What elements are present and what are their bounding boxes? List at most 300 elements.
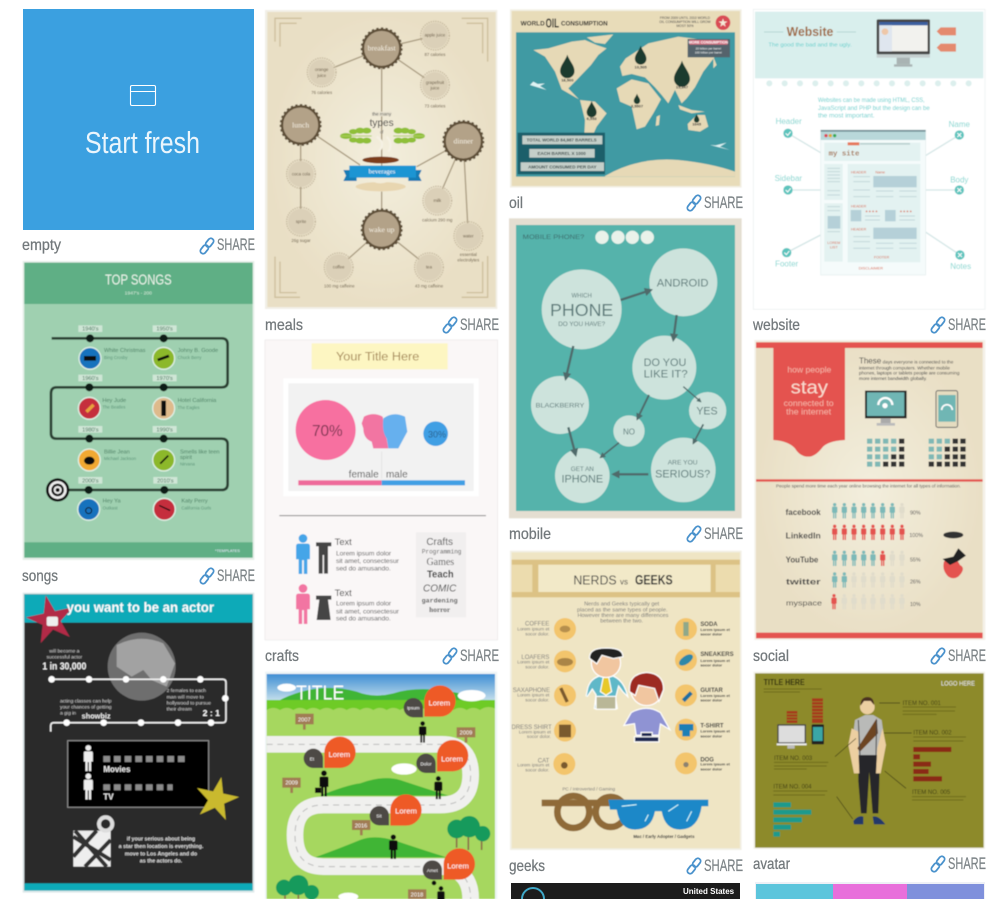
heading: NERDS	[573, 573, 617, 588]
text: location	[119, 837, 204, 864]
panel: meals template: 73 calories	[425, 103, 445, 108]
connectors and checkpoints: Name	[949, 120, 971, 129]
panel: world oil template: FROM 2009 UNTIL 2010 WORLD	[660, 16, 711, 20]
panel: start fresh card	[23, 9, 254, 230]
song titles: Billie Jean	[104, 449, 130, 455]
panel: meals template: tea	[426, 265, 433, 270]
panel: nerds vs geeks template: Mac / Early Adopter / Gadgets	[633, 834, 695, 839]
label: website	[752, 316, 986, 334]
icon: monitor	[877, 19, 930, 67]
percent labels: 26%	[910, 579, 921, 585]
signposts: 2009	[460, 730, 472, 736]
label: songs	[22, 567, 255, 585]
people with text: Text	[335, 537, 352, 547]
song titles: Smells like teen	[180, 449, 220, 455]
badge labels: wake up	[369, 225, 395, 234]
icon: yellow star	[192, 773, 242, 822]
chart: red bars	[913, 747, 951, 781]
percent labels: 55%	[910, 558, 921, 564]
panel: meals template	[265, 10, 497, 309]
label: oil	[509, 194, 743, 212]
left column text: Lorem ipsum et	[517, 693, 550, 698]
panel: crafts template	[265, 340, 498, 640]
text: 2 females: man will move to	[167, 694, 204, 700]
connectors and checkpoints: Sidebar	[775, 174, 802, 183]
trees	[276, 816, 490, 899]
text: location: as the actors do.	[140, 858, 183, 864]
bubbles: Lorem	[328, 750, 350, 759]
right column text: SNEAKERS	[700, 652, 734, 658]
panel: world oil template: MOST 50%	[676, 24, 694, 28]
intro text	[818, 98, 930, 120]
left column text: socor dolor.	[525, 631, 549, 636]
chart: devices	[777, 698, 824, 749]
text: 2 females: their dream	[167, 706, 192, 712]
panel: nerds vs geeks template: PC / Introverted / Gaming	[562, 787, 616, 792]
illustration: browser wireframe: ★★★★	[899, 210, 913, 214]
panel: meals template: 87 calories	[425, 52, 445, 57]
panel: top songs template	[23, 261, 254, 560]
left column text: CAT	[538, 758, 550, 764]
bubbles: Lorem	[428, 699, 450, 708]
panel: meals template: sprite	[296, 219, 307, 224]
flow labels: LIKE IT?	[644, 369, 688, 381]
tags	[937, 27, 956, 52]
label: mobile	[509, 525, 743, 543]
road	[267, 744, 471, 899]
left column icons	[553, 618, 576, 775]
social network names: facebook	[786, 507, 821, 517]
left column text: COFFEE	[525, 622, 549, 628]
people with text: Text	[335, 588, 352, 598]
label: mobile: mobile	[509, 526, 551, 543]
illustration: browser wireframe: HEADER	[851, 204, 867, 208]
illustration: glasses	[542, 796, 708, 830]
label: avatar: avatar	[753, 856, 791, 873]
icon: star badge	[716, 15, 730, 30]
callout: consumption: 20 billion per barrel	[696, 47, 721, 51]
stat: 1 in 30,000: successful actor	[46, 654, 83, 660]
panel: meals template: 43 mg caffeine	[415, 283, 444, 288]
intro text: between the two.	[600, 619, 643, 625]
intro text: Nerds and Geeks typically get	[584, 601, 660, 607]
people with text	[296, 534, 400, 624]
people with text: Lorem ipsum dolor	[336, 550, 392, 557]
panel: meals template: calcium 290 mg	[422, 217, 453, 222]
percent labels	[909, 510, 923, 608]
panel: meals template: juice	[316, 73, 327, 78]
left column text: socor dolor.	[525, 767, 549, 772]
heading: LOGO HERE	[941, 681, 975, 688]
bubbles: Lorem	[395, 807, 417, 816]
word cloud: Games	[426, 557, 454, 568]
song titles: Hey Jude	[102, 398, 126, 404]
song titles: Hotel California	[178, 398, 217, 404]
right column text: SODA	[700, 622, 718, 628]
panel: meals template: 76 calories	[311, 90, 332, 95]
title banner	[312, 343, 448, 369]
people with text: sit amet, consectesur	[336, 558, 400, 565]
illustration: browser wireframe: HEADER	[851, 170, 867, 174]
callout: totals: AMOUNT CONSUMED PER DAY	[528, 164, 597, 170]
decade labels: 1970's	[156, 376, 173, 382]
items: ITEM NO. 004	[773, 784, 812, 790]
bubbles: Amet	[427, 868, 438, 873]
banner: how people stay connected: connected to	[784, 399, 834, 408]
right column text: Lorem ipsum et	[700, 729, 731, 734]
panel: movies vs tv: TV	[103, 792, 114, 801]
panel: meals template: 100 mg caffeine	[324, 283, 355, 288]
word cloud	[416, 532, 466, 617]
label: crafts: SHARE	[460, 647, 499, 665]
right column text: DOG	[700, 757, 714, 763]
bubbles: Et	[310, 756, 315, 761]
text: acting classes: acting classes can help	[60, 699, 112, 705]
panel: avatar template	[753, 672, 985, 849]
text: location: move to Los Angeles and do	[125, 851, 198, 857]
panel: top songs template: Michael Jackson	[104, 456, 137, 461]
center: types of beverages: beverages	[369, 169, 396, 176]
right column text: GUITAR	[700, 688, 723, 694]
chart: phone grid	[929, 439, 966, 467]
right column text: socor dolor	[700, 698, 723, 703]
word cloud: Programming	[422, 548, 462, 555]
callout: consumption: MORE CONSUMPTION	[689, 41, 728, 45]
left column text: Lorem ipsum et	[517, 660, 550, 665]
chart: gender split	[283, 378, 479, 496]
connectors and checkpoints: Notes	[950, 262, 971, 271]
bubbles	[304, 685, 475, 880]
heading: start fresh: Start fresh	[85, 125, 200, 160]
decade labels: 1990's	[156, 427, 173, 433]
bubbles: Lorem	[441, 755, 463, 764]
signposts: 2016	[355, 823, 367, 829]
heading: you want to be an actor	[67, 599, 214, 615]
right column text: Lorem ipsum et	[700, 627, 731, 632]
badge labels: lunch	[292, 121, 309, 130]
text: 2 females: 2 : 1	[203, 708, 220, 718]
panel: social template	[754, 340, 985, 640]
heading	[538, 565, 711, 592]
decade labels: 1980's	[82, 427, 99, 433]
icon: browser window	[130, 86, 156, 106]
stat: 1 in 30,000: will become a	[49, 649, 80, 655]
flow labels: PHONE	[550, 300, 613, 320]
header band	[755, 12, 983, 78]
connectors and checkpoints: Header	[776, 117, 802, 126]
walkers	[315, 721, 445, 899]
panel: meals template: apple juice	[425, 33, 446, 38]
flow labels: ARE YOU	[668, 459, 698, 466]
decorative dots	[766, 80, 972, 86]
panel: nerds vs geeks template	[510, 551, 742, 850]
intro text: These	[859, 357, 882, 366]
chart: gender split: 70%	[312, 423, 343, 440]
panel: social template: People spend more time each year online browsing the internet for all types of information.	[776, 483, 961, 488]
items: ITEM NO. 002	[913, 731, 952, 737]
chart: teal bars	[773, 802, 811, 837]
decade markers	[85, 334, 168, 494]
flow labels: ANDROID	[657, 278, 709, 290]
chart: timeline track	[51, 338, 228, 490]
left column text: socor dolor.	[527, 734, 551, 739]
panel: mobile flowchart template: MOBILE PHONE?	[523, 234, 585, 241]
signposts: 2009	[285, 781, 298, 787]
badge labels: breakfast	[368, 44, 397, 53]
panel: meals template: coffee	[333, 265, 345, 270]
decade labels: 1960's	[82, 376, 99, 382]
word cloud: COMIC	[423, 583, 457, 594]
text: location: if your serious about being	[127, 837, 195, 843]
chart: gender split: female	[349, 470, 379, 481]
heading: TITLE	[296, 682, 344, 704]
callout: consumption: 100 billion per barrel	[695, 51, 722, 55]
label: empty	[22, 236, 255, 255]
label: empty: SHARE	[217, 236, 255, 254]
label: geeks: SHARE	[704, 857, 743, 875]
signposts: 2018	[411, 893, 423, 899]
illustration: man	[848, 697, 886, 824]
panel: dark template cropped	[511, 883, 740, 899]
text: acting classes: a gig in	[60, 711, 76, 717]
people with text: sit amet, consectesur	[336, 608, 400, 615]
song pins	[78, 347, 175, 520]
panel: movies vs tv	[68, 741, 209, 807]
panel: meals template: milk	[433, 198, 442, 203]
flow circles	[531, 248, 726, 503]
left column text	[512, 622, 552, 772]
panel: actor template	[22, 590, 254, 893]
intro text: internet through computers. Whether mobile	[859, 365, 950, 370]
word cloud: Crafts	[426, 537, 453, 548]
right column text: socor dolor	[700, 733, 723, 738]
panel: top songs template: TOP SONGS	[105, 272, 172, 288]
center: types of beverages	[340, 111, 425, 191]
heading: vs	[620, 578, 628, 587]
bubbles: Ipsum	[407, 706, 420, 711]
panel: dark template cropped: United States	[683, 887, 735, 896]
social network names: LinkedIn	[786, 530, 821, 540]
text: location: a star then location is everything.	[119, 844, 204, 850]
chart: world map: 15,347	[676, 85, 689, 90]
text: acting classes: your chances of getting	[60, 704, 112, 710]
chart: world map	[516, 32, 735, 177]
social network names: myspace	[786, 599, 822, 608]
heading	[521, 16, 608, 30]
label: oil: oil	[509, 195, 523, 212]
panel: colourful template cropped	[755, 882, 985, 899]
word cloud: Teach	[427, 570, 454, 581]
banner: how people stay connected: how people	[787, 365, 832, 374]
right column text: socor dolor	[700, 766, 723, 771]
icon: map pin	[73, 817, 112, 867]
label: crafts: crafts	[265, 648, 299, 665]
connectors and checkpoints	[775, 117, 971, 271]
song titles: Katy Perry	[181, 498, 208, 504]
people with text: Lorem ipsum dolor	[336, 601, 392, 608]
illustration: browser wireframe: LOREM	[827, 241, 840, 245]
flow labels	[536, 278, 718, 486]
flow labels: SERIOUS?	[655, 468, 710, 480]
intro text	[577, 601, 669, 625]
panel: meals template: water	[463, 233, 474, 238]
connectors and checkpoints: Footer	[775, 260, 799, 269]
text: acting classes: showbiz	[82, 711, 111, 720]
panel: world oil template	[510, 9, 742, 188]
icon: phone	[936, 391, 958, 427]
badge labels	[292, 44, 474, 234]
flow arrows	[566, 290, 703, 474]
intro text: days everyone is connected to the	[883, 360, 954, 365]
people with text: sed do amusando.	[336, 616, 391, 623]
intro text: Websites can be made using HTML, CSS,	[818, 98, 925, 104]
panel: top songs template: Nirvana	[180, 462, 195, 467]
bubbles: Lorem	[447, 861, 469, 870]
intro text: However there are many differences	[577, 613, 669, 619]
callout: totals: EACH BARREL X 1000	[537, 151, 586, 157]
label: meals	[265, 316, 499, 334]
decade labels	[78, 325, 177, 484]
flow labels: WHICH	[572, 293, 592, 299]
song titles	[102, 348, 220, 504]
decade labels: 1940's	[82, 327, 99, 333]
flow labels: YES	[696, 405, 718, 417]
text: 2 females	[167, 688, 220, 718]
heading: CONSUMPTION	[561, 21, 608, 28]
social network names: YouTube	[786, 555, 818, 565]
panel: top songs template: Chuck Berry	[178, 355, 202, 360]
panel: top songs template: 1947's - 200	[125, 291, 152, 297]
callout: consumption	[688, 39, 730, 57]
chart: world map: 6,553	[587, 116, 597, 121]
left column text: LOAFERS	[521, 655, 549, 661]
label: meals: SHARE	[460, 316, 499, 334]
right column icons	[675, 618, 697, 774]
flow labels: IPHONE	[561, 474, 603, 486]
right column text: T-SHIRT	[700, 723, 724, 729]
chart: world map: 18,500	[561, 77, 574, 82]
panel: top songs template: California Gurls	[181, 505, 211, 510]
flow labels: DO YOU HAVE?	[558, 321, 606, 328]
percent labels: 90%	[910, 510, 921, 516]
panel: road timeline template	[265, 672, 497, 899]
label: oil: SHARE	[704, 194, 743, 212]
label: empty: empty	[22, 237, 61, 254]
illustration: browser wireframe	[821, 130, 926, 275]
chart: gender split: 30%	[428, 430, 446, 440]
panel: meals template: grapefruit	[426, 80, 445, 85]
panel: top songs template: *TEMPLATES	[215, 548, 240, 553]
items: ITEM NO. 001	[903, 701, 942, 707]
illustration: nerd	[587, 649, 627, 709]
small badges	[421, 21, 449, 50]
right column text	[700, 622, 734, 771]
chart: world map: 10,505	[635, 65, 648, 70]
illustration: browser wireframe: DISCLAIMER	[859, 266, 883, 271]
right column text: Lorem ipsum et	[700, 762, 731, 767]
label: meals: meals	[265, 317, 303, 334]
bubbles: Dolor	[420, 761, 432, 766]
panel: top songs template: Outkast	[103, 505, 118, 510]
stat: 1 in 30,000: 1 in 30,000	[42, 661, 87, 672]
label: avatar	[753, 855, 986, 873]
illustration: browser wireframe: HEADER	[851, 228, 867, 232]
header band: Website	[787, 24, 833, 39]
chart: world map: 3,5507	[631, 104, 644, 109]
panel: meals template: coca cola	[292, 171, 311, 176]
percent labels: 100%	[909, 533, 923, 539]
intro text: placed as the same types of people.	[577, 607, 668, 613]
right column text: Lorem ipsum et	[700, 693, 731, 698]
social network names	[786, 507, 822, 608]
right column text: Lorem ipsum et	[700, 658, 731, 663]
flow labels: GET AN	[571, 466, 594, 473]
signposts: 2007	[298, 717, 311, 723]
decade labels: 2000's	[82, 478, 99, 484]
center: types of beverages: the many	[372, 111, 392, 116]
left column text: Lorem ipsum et	[517, 627, 550, 632]
left column text: socor dolor.	[525, 664, 549, 669]
text: 2 females: 2 females to each	[167, 688, 206, 694]
percent labels: 10%	[910, 602, 921, 608]
banner: how people stay connected	[773, 348, 845, 457]
intro text	[859, 357, 960, 381]
intro text: the most important.	[818, 114, 875, 120]
illustration: browser wireframe: FOOTER	[874, 256, 890, 260]
chart: dotted track	[48, 676, 229, 732]
text: 2 females: hollywood to pursue	[167, 700, 211, 706]
signposts	[282, 714, 475, 899]
panel: meals template: essential	[460, 252, 477, 257]
label: songs: songs	[22, 568, 58, 585]
items: ITEM NO. 005	[912, 790, 951, 796]
label: geeks	[509, 857, 743, 875]
header band: The good the bad and the ugly.	[768, 42, 852, 48]
callout: totals	[518, 133, 605, 174]
center: types of beverages: types	[370, 118, 394, 129]
connectors and checkpoints: Body	[950, 176, 968, 185]
chart: gender split: male	[386, 470, 408, 481]
callout: totals: TOTAL WORLD 84,987 BARRELS	[527, 138, 597, 144]
heading: TITLE HERE	[764, 677, 805, 687]
panel: top songs template: The Eagles	[178, 405, 200, 410]
decade labels: 1950's	[156, 327, 173, 333]
heading: WORLD	[521, 21, 545, 28]
flow labels: NO	[623, 427, 635, 436]
left column text: SAXAPHONE	[513, 688, 550, 694]
intro text: JavaScript and PHP but the design can be	[818, 106, 930, 112]
song titles: Johny B. Goode	[178, 348, 218, 354]
right column text: socor dolor	[700, 662, 723, 667]
items	[773, 701, 952, 796]
flow labels: DO YOU	[644, 357, 686, 369]
panel: meals template: juice	[430, 86, 440, 91]
heading: GEEKS	[635, 572, 673, 588]
right column text: socor dolor	[700, 632, 723, 637]
label: geeks: geeks	[509, 858, 545, 875]
intro text: phones, laptops or tablets people are consuming	[859, 371, 960, 376]
panel: mobile flowchart template	[509, 218, 742, 518]
connectors	[301, 36, 468, 267]
panel: meals template: 26g sugar	[291, 238, 311, 243]
icon: burning person	[943, 532, 966, 578]
icon: red star	[22, 590, 79, 645]
label: crafts	[265, 647, 499, 665]
chart: world map: 1045	[692, 121, 702, 126]
decade labels: 2010's	[157, 478, 174, 484]
center: types of beverages: of	[380, 130, 384, 135]
text: acting classes	[60, 699, 112, 720]
